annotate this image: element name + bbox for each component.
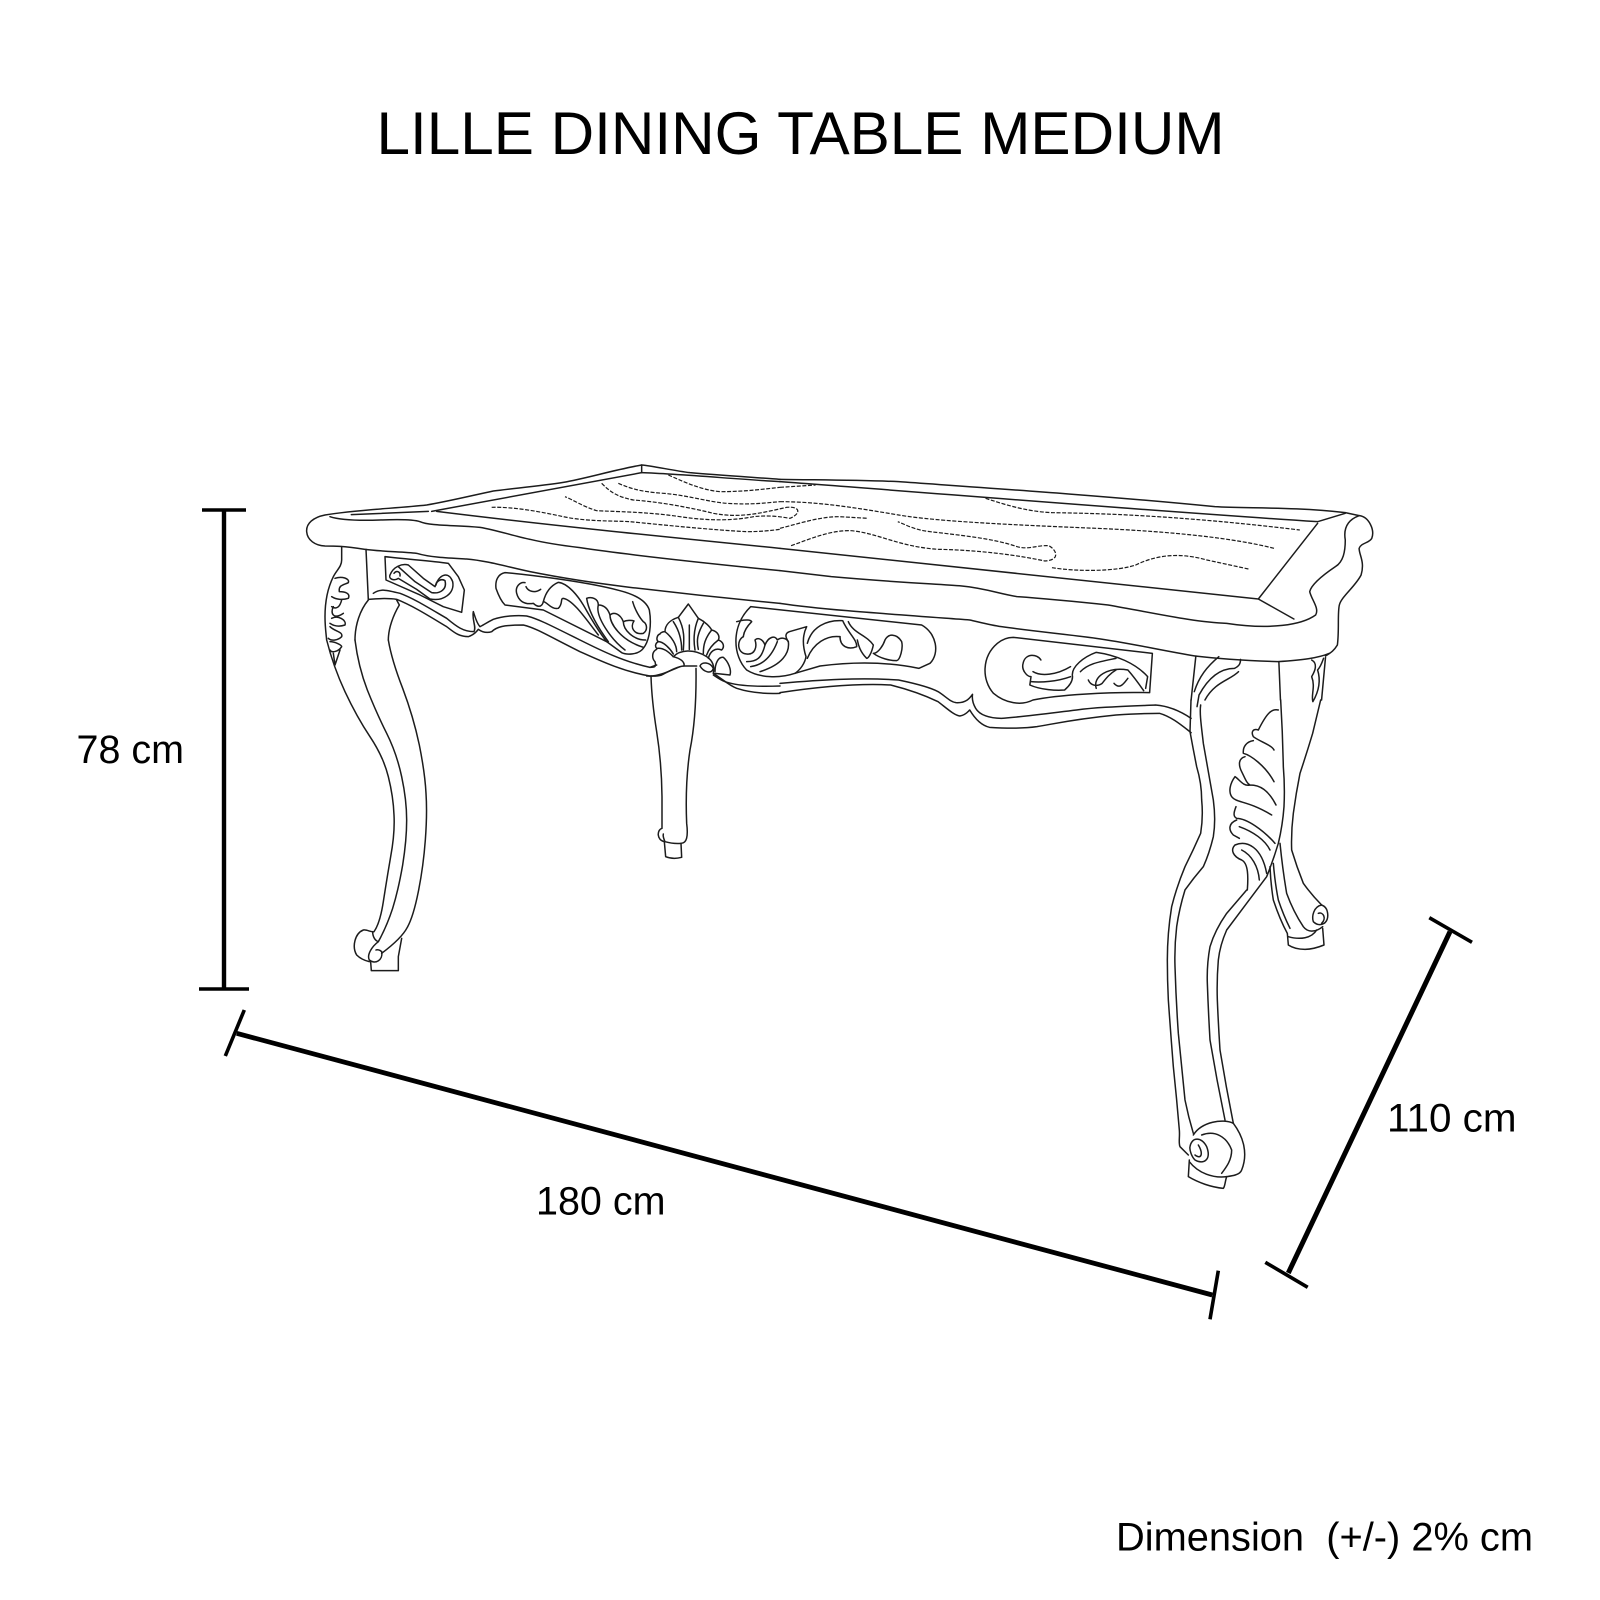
carving: centre shell — [647, 604, 730, 676]
carving panel: acanthus left of shell — [496, 573, 650, 654]
table top right half — [780, 479, 1373, 662]
depth dimension: 110 cm: 110 cm — [1387, 1096, 1516, 1140]
leg top — [1191, 656, 1326, 707]
tolerance note: Dimension (+/-) 2% cm — [1116, 1516, 1533, 1560]
leg lower — [1167, 700, 1284, 1188]
wood grain dashes left — [492, 475, 798, 532]
leg top — [325, 547, 399, 665]
leg lower — [327, 640, 427, 971]
carving panel: acanthus right of shell — [736, 607, 936, 677]
apron centre section — [713, 673, 780, 693]
front right leg — [1167, 656, 1326, 1188]
carving panel: left scroll — [385, 557, 464, 612]
depth dimension: 110 cm — [1265, 918, 1516, 1287]
table line drawing — [307, 465, 1373, 1188]
back centre leg — [651, 668, 696, 858]
title: LILLE DINING TABLE MEDIUM — [376, 99, 1224, 167]
back right leg — [1270, 700, 1328, 949]
apron left section — [368, 590, 680, 676]
leaf carving — [1230, 710, 1278, 890]
height dimension: 78 cm: 78 cm — [76, 728, 184, 772]
wood grain dashes right — [780, 485, 1300, 570]
apron right section — [780, 679, 1191, 733]
length dimension: 180 cm — [225, 1010, 1218, 1319]
length dimension: 180 cm: 180 cm — [536, 1180, 666, 1224]
carving panel: far right — [985, 637, 1152, 703]
table top left half — [307, 465, 780, 603]
front left leg — [325, 547, 427, 971]
